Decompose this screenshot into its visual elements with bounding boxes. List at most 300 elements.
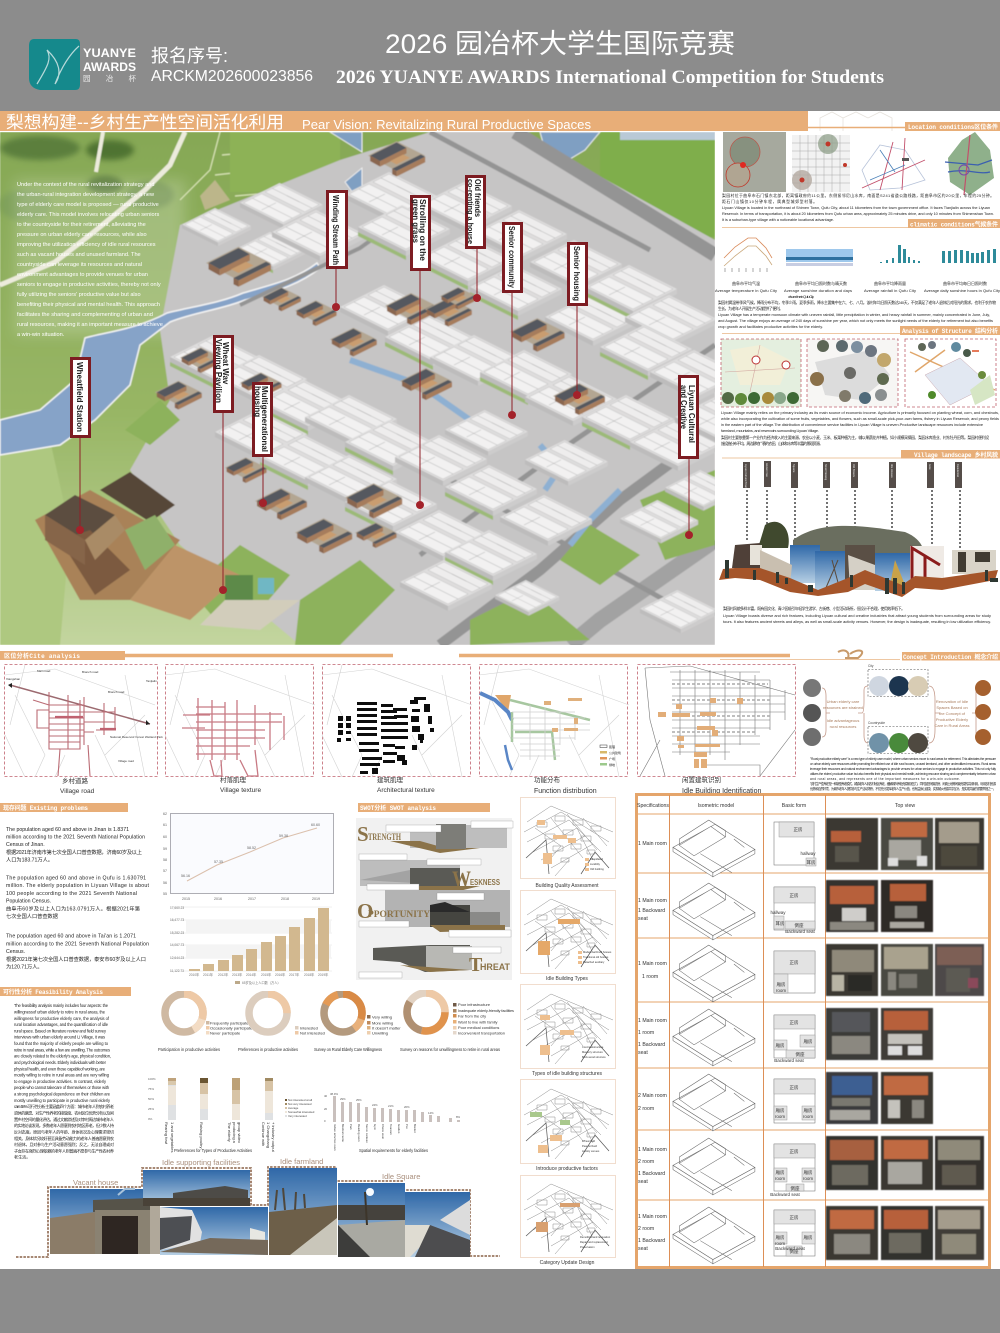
chart: stacked bars: Preferences for Types of Productive Activities: [174, 1148, 252, 1153]
chart: elderly population bar chart: 2014年: [246, 972, 257, 977]
chart: stacked bars: 25%: [148, 1107, 154, 1111]
map: idle building types: [520, 890, 616, 974]
chart: elderly population bar chart: 12,644.23: [170, 956, 184, 960]
concept countryside box: Countryside: [868, 721, 885, 725]
section bar: 区位分析Cite analysis: [4, 652, 80, 660]
panel: analysis of structure: [721, 326, 1000, 446]
callout: Liyuan Cultural and Creative: and Creative: [679, 385, 688, 429]
basic form plans: 倒座: [794, 922, 804, 929]
intro paragraph over aerial: Under the context of the rural revitalization strategy and: [17, 182, 154, 188]
basic form plans: 正房: [790, 1214, 799, 1221]
chart: elderly share line chart: 2019: [312, 897, 320, 901]
text: feasibility: 反对态度。原因与老年人的年龄、身体状况及心理需求密切: [14, 1128, 114, 1134]
chart captions: Average sunshine duration and days: [784, 288, 852, 293]
section label: location: [805, 122, 1000, 131]
text: feasibility: are closely related to the elderly's age, physical condition,: [14, 1054, 111, 1058]
chart: elderly share line chart: 56: [163, 881, 167, 885]
panel: village road map: National Reservoir Forest Wetland Park: [110, 735, 163, 739]
chart: elderly share line chart: 58.52: [247, 846, 256, 850]
chart: spatial requirements bars: Spatial requirements for elderly facilities: [359, 1148, 428, 1153]
panel: village road map: Tanjialin: [146, 679, 157, 683]
swot: strength: TRENGTH: [368, 832, 401, 842]
section label: structure: [722, 326, 1000, 335]
table header: Isometric model: [698, 803, 734, 809]
chart captions: [715, 280, 1000, 299]
text: climate: 梨园村属温带季风气候，降雨分布不均，冬季少雨，夏季多雨，降水主要集中在六、七、八月。该村年均日照天数达240天，不仅满足了老年人退休后对阳光的需求，也利于农作物: [718, 300, 996, 305]
section label: concept: Concept Introduction 概念介绍: [903, 653, 998, 661]
basic form plans: 正房: [790, 892, 799, 899]
chart: elderly share line chart: 61: [163, 823, 167, 827]
caption: idle building identification: Idle Building Identification: [682, 788, 761, 795]
map: idle structure types: Masonry structure: [582, 1050, 603, 1054]
canals: [350, 360, 620, 545]
text: structure: 施设施分布不均。周边耕地广袤的农田、山体和水库等丰富的景观资源。: [721, 441, 823, 446]
chart: elderly share line chart: 59: [163, 847, 167, 851]
swot: threat: T: [469, 954, 483, 976]
intro paragraph over aerial: the urban-rural integration development strategy, a new: [17, 192, 155, 198]
chart: spatial requirements bars: Reading room: [357, 1124, 361, 1142]
swot: opportunity: PPORTUNITY: [368, 909, 431, 919]
chart: unwillingness donut: Poor medical conditions: [458, 1025, 499, 1030]
intro paragraph over aerial: environment advantages to provide venues for urban: [17, 272, 148, 278]
panel: function distribution map: 公共建筑: [609, 750, 621, 755]
caption: village road: 乡村道路: [62, 776, 88, 785]
panel: idle building specifications table: [636, 794, 990, 1268]
chart: stacked bars: 1 Changchang: [266, 1122, 271, 1148]
chart: stacked bars: 1 and vegetables: [170, 1122, 175, 1152]
swot: weakness: W: [452, 866, 471, 891]
decoration: scooter icon: [838, 650, 862, 658]
map: idle building types: Traditional old houses: [583, 955, 609, 959]
panel: SWOT analysis: [356, 803, 513, 980]
chart: elderly population bar chart: 14,067.73: [170, 943, 184, 947]
concept right text: the Concept of: [939, 711, 966, 716]
landscape tags: Gate: [928, 464, 932, 470]
concept text: [810, 757, 997, 791]
chart: spatial requirements bars: Garden: [397, 1124, 401, 1134]
dashed photo frame: [16, 1167, 500, 1257]
chart: stacked bars: Raising poultry: [199, 1122, 204, 1148]
panel: feasibility analysis: [0, 987, 514, 1160]
callout: Old friends co-renting a house: [466, 176, 484, 302]
chart: elderly population bar chart: 2013年: [232, 972, 243, 977]
callout: Liyuan Cultural and Creative: Liyuan Cultural: [687, 385, 696, 443]
table row labels: 1 Backward: [638, 1171, 665, 1177]
chart captions: 曲阜市平均每日日照时数: [943, 280, 987, 286]
map: idle structure types: [520, 984, 616, 1068]
text: structure: farmland, mountains, and reservoirs surrounding Liyuan Village.: [721, 428, 819, 433]
panel: architectural texture map: [322, 664, 472, 777]
chart: spatial requirements bars: 21%: [388, 1104, 394, 1108]
chart: elderly share line chart: 56.16: [181, 874, 190, 878]
map: productive factors: Wheat field: [582, 1139, 596, 1143]
chart: elderly population bar chart: 17,660.23: [170, 906, 184, 910]
chart: spatial requirements bars: 40: [324, 1094, 328, 1098]
caption: types: Idle Building Types: [546, 976, 588, 982]
chart: spatial requirements bars: Tearoom: [389, 1124, 393, 1136]
competition subtitle: 2026 YUANYE AWARDS International Competition for Students: [336, 67, 884, 88]
logo: [29, 39, 136, 90]
table row labels: 1 Main room: [638, 1214, 667, 1220]
table row labels: seat: [638, 1050, 648, 1056]
text: feasibility: willingness for productive elderly care, the analysis of: [14, 1016, 110, 1021]
text: location: 梨园村位于曲阜市石门镇东北部，距离镇政府约11公里。东侧紧邻尼山水库，南面是S241省道公路线路，距曲阜市区约20公里，车程约25分钟。: [722, 193, 994, 198]
text: climate: Liyuan Village has a temperate monsoon climate with uneven rainfall, little precipitation in winter, and heavy rainfall in summer, mainly concentrated in June, July,: [718, 312, 990, 317]
chart: spatial requirements bars: 29%: [340, 1097, 346, 1101]
text: village landscape: tours. It also features ancient streets and alleys, as well as small-scale activity venues. However, the design is inadequate, resulting in low utilization efficiency.: [723, 619, 991, 624]
chart: willingness donut: It doesn't matter: [372, 1026, 401, 1030]
map: road network: [862, 138, 925, 190]
chart: elderly share line chart: 62: [163, 812, 167, 816]
concept left text: Urban elderly care: [827, 699, 860, 704]
basic form plans: 耳房: [776, 920, 785, 927]
caption: function distribution: 功能分布: [534, 775, 560, 784]
callout: Wheatfield Station: [72, 358, 90, 534]
basic form plans: hallway: [800, 851, 816, 856]
chart: spatial requirements bars: 20: [324, 1107, 328, 1111]
callout: Winding Stream Path: Winding Stream Path: [331, 195, 341, 265]
swot: opportunity: [357, 890, 511, 937]
basic form plans: 厢房: [776, 1169, 785, 1176]
chart: stacked bars: 50%: [148, 1097, 154, 1101]
panorama collage: [719, 522, 998, 597]
bright green patches: [125, 400, 715, 645]
panel: function distribution map: 绿地: [609, 762, 615, 767]
table row labels: seat: [638, 1179, 648, 1185]
chart: elderly share line chart: 2017: [248, 897, 256, 901]
landscape tags: Small Viewing: [824, 464, 828, 481]
text: feasibility: mostly willing to retire in rural areas and are very willing: [14, 1072, 110, 1078]
table row labels: 2 Main room: [638, 1093, 667, 1099]
dark roof courtyard buildings: [155, 141, 605, 554]
intro paragraph over aerial: such as vacant houses and unused farmland. The: [17, 252, 141, 258]
text: location: [722, 193, 994, 222]
chart: elderly share line chart: 60: [163, 835, 167, 839]
basic form plans: 厢房: [776, 1042, 785, 1049]
chart: stacked bars: Not interested at all: [288, 1098, 312, 1102]
text: village landscape: Liyuan Village boasts diverse and rich features, including Liyuan cultural and creative industries that attract young students from surrounding areas for study: [723, 613, 991, 618]
chart: spatial requirements bars: [324, 1092, 461, 1153]
text: feasibility: retire in rural areas, while a few are unwilling. The outcomes: [14, 1048, 110, 1052]
caption: factors: Introduce productive factors: [536, 1166, 598, 1172]
chart: elderly share line chart: [163, 812, 334, 901]
chart: elderly share line chart: 57.35: [214, 860, 223, 864]
basic form plans: Backward seat: [785, 929, 816, 934]
concept left text: resources are strained: [823, 705, 863, 710]
table row labels: 1 Backward: [638, 1238, 665, 1244]
concept countryside box: [868, 721, 928, 754]
basic form plans: 厢房: [776, 981, 786, 988]
chart: stacked bars: Somewhat interested: [288, 1110, 315, 1114]
text: existing problems: 根据2021年第七次全国人口普查数据，泰安市60岁及以上人口: [6, 955, 146, 963]
panel: location conditions: [722, 122, 1000, 222]
landscape tags: Ancient tree: [765, 463, 769, 477]
chart: spatial requirements bars: 8%: [456, 1115, 461, 1119]
chart: stacked bars: Average: [288, 1106, 299, 1110]
isometric models: [673, 820, 755, 1264]
text: existing problems: The population aged 60 and above in Jinan is 1.8371: [6, 827, 129, 833]
concept outcome circles: [975, 680, 991, 745]
basic form plans: room: [803, 1114, 813, 1119]
map: building quality: [520, 798, 616, 878]
panel: existing problems: [0, 803, 334, 985]
text: climate: crop growth and facilitates productive activities for the elderly.: [718, 324, 823, 329]
text: existing problems: Census of Jinan.: [6, 842, 45, 848]
text: existing problems: [6, 827, 150, 970]
chart: unwillingness donut: [400, 993, 514, 1052]
chart: participation donut: Never participate: [210, 1030, 241, 1036]
panel: concept introduction: [720, 652, 1000, 791]
section label: existing: 现存问题 Existing problems: [3, 804, 88, 812]
chart: stacked bars: Not very interested: [288, 1102, 312, 1106]
text: location: It is a suburban-type village with a noticeable locational advantage.: [722, 217, 834, 222]
chart: participation donut: Occasionally participate: [210, 1026, 253, 1030]
callout: Old friends co-renting a house: co-renting a house: [466, 179, 475, 244]
chart: stacked bars: The elderly: [227, 1122, 232, 1142]
map: landscape resources: [721, 339, 801, 407]
logo: YUANYE: [83, 48, 136, 60]
photo: idle supporting top: [143, 1170, 250, 1206]
caption: update: Category Update Design: [540, 1260, 595, 1266]
callout: Strolling on the green grass: [411, 196, 430, 509]
chart: temperature: [724, 238, 772, 272]
logo: 园 冶 杯: [83, 73, 136, 83]
intro paragraph over aerial: countryside can leverage its resources and natural: [17, 262, 142, 268]
text: feasibility: [14, 1003, 114, 1160]
panel: village road map: Branch road: [108, 690, 125, 694]
text: existing problems: 七次全国人口普查数据: [6, 912, 58, 920]
chart captions: of sunshine in Qufu City: [788, 294, 814, 299]
chart: willingness donut: More willing: [372, 1020, 393, 1026]
concept connectors: [822, 686, 979, 743]
panel: climatic conditions: [715, 219, 1000, 329]
chart: stacked bars: Continue with: [261, 1122, 266, 1146]
text: existing problems: million. The elderly population in Liyuan Village is about: [6, 883, 150, 889]
chart: spatial requirements bars: Park: [349, 1124, 353, 1130]
basic form plans: 倒座: [796, 1051, 805, 1058]
text: existing problems: Census.: [6, 949, 25, 955]
chart: daily sunshine: [942, 249, 996, 263]
basic form plans: room: [803, 1176, 813, 1181]
concept text: on urban elderly care resources while promoting the efficient use of idle rural houses, unused farmland, and other underutilized resources. Rural areas: [810, 762, 996, 766]
map: productive factors: [520, 1080, 616, 1164]
basic form plans: Backward seat: [775, 1246, 806, 1251]
concept city box: [868, 664, 928, 696]
concept text: 优势和自然环境，为城市老年人提供参与生产活动场所，不仅充分发挥老年人生产价值，也有益身心健康，实现城乡资源共享互补，是实现共赢的重要举措之一。: [810, 786, 996, 791]
text: feasibility: 的实地访谈发现，多数老年人愿意到农村地区养老，但少数人持: [14, 1122, 114, 1128]
table row labels: seat: [638, 916, 648, 922]
chart captions: Average temperature in Qufu City: [715, 288, 777, 293]
intro paragraph over aerial: improving the utilization efficiency of idle rural resources: [17, 242, 156, 248]
callout: Multigenerational housing: [253, 384, 272, 507]
chart: elderly share line chart: 60.60: [311, 823, 320, 827]
basic form plans: room: [775, 1114, 785, 1119]
registration number: ARCKM202600023856: [151, 68, 313, 85]
chart: participation donut: Participation in productive activities: [158, 1047, 220, 1052]
project title band: [0, 111, 892, 132]
caption: village texture: 村落肌理: [220, 775, 246, 784]
basic form plans: 厢房: [776, 1107, 785, 1114]
village ground: [130, 132, 715, 645]
caption: village texture: [220, 775, 261, 794]
panel: site analysis: [0, 651, 796, 795]
caption: architectural texture: Architectural texture: [377, 787, 435, 794]
landscape tags: Square: [792, 464, 796, 473]
photo labels: Idle farmland: [280, 1157, 323, 1166]
callout: Wheat Way Viewing Pavilion: [214, 336, 232, 594]
chart: rainfall: [880, 245, 920, 263]
photo labels: [73, 1157, 420, 1187]
concept left text: rural resources: [830, 724, 856, 729]
text: climate: 生长，为老年人开展生产活动提供了便利。: [718, 306, 783, 311]
text: existing problems: 为120.71万人。: [6, 962, 43, 970]
callout: Old friends co-renting a house: Old friends: [473, 179, 482, 217]
table row labels: 1 Main room: [638, 1018, 667, 1024]
callout: Wheat Way Viewing Pavilion: Viewing Pavilion: [214, 339, 223, 403]
aerial axonometric masterplan: [0, 132, 767, 645]
basic form plans: Backward seat: [774, 1058, 805, 1063]
panel: village texture map: [165, 664, 315, 777]
section label: swot: SWOT分析 SWOT analysis: [360, 804, 436, 812]
callout: Senior housing: Senior housing: [572, 246, 582, 301]
photo labels: Idle supporting facilities: [162, 1158, 240, 1167]
text: existing problems: 100 people according to the 2021 Seventh National: [6, 891, 137, 897]
chart: stacked bars: 75%: [148, 1087, 154, 1091]
chart: elderly share line chart: 2016: [214, 897, 222, 901]
swot: weakness: ESKNESS: [470, 878, 501, 887]
text: feasibility: 老生活。: [14, 1154, 30, 1160]
photo: idle square: [338, 1183, 405, 1257]
landscape tags: Residential: [956, 464, 960, 477]
chart captions: 曲阜市平均降雨量: [874, 280, 906, 286]
text: feasibility: 相关。身体状况较好甚至具备劳动能力的老年人普遍愿意到农: [14, 1135, 114, 1141]
chart: spatial requirements bars: Market: [413, 1124, 417, 1133]
basic form plans: 正房: [794, 826, 803, 833]
callout: Senior community: Senior community: [507, 226, 517, 288]
table row labels: 1 room: [642, 974, 658, 980]
chart: unwillingness donut: Inadequate elderly-friendly facilities: [458, 1008, 514, 1013]
landscape ground: [0, 132, 715, 645]
text: structure: while also incorporating the cultivation of some fruits, vegetables, and flowers, such as small-scale pick-your-own farms, fishery in Liyuan Reservoir, and peony fields: [721, 416, 999, 421]
chart: elderly population bar chart: 2012年: [218, 972, 229, 977]
chart: stacked bars: + industry output: [271, 1122, 276, 1153]
chart: spatial requirements bars: 0: [324, 1119, 326, 1123]
basic form plans: 正房: [790, 1019, 799, 1026]
project title band: 梨想构建--乡村生产性空间活化利用: [6, 113, 284, 132]
landscape tags: Old Streets: [852, 464, 856, 478]
section label: village landscape: [722, 450, 1000, 459]
logo: AWARDS: [83, 62, 136, 74]
text: existing problems: Population Census.: [6, 898, 51, 904]
chart: participation donut: Frequently participate: [210, 1020, 249, 1026]
text: existing problems: million according to the 2021 Seventh National Population: [6, 942, 149, 948]
text: feasibility: 置乡村空间的量化评估。通过文献综述及对李村周边城市老年人: [14, 1116, 114, 1122]
table row labels: [638, 841, 667, 1252]
text: climate: and August. The village enjoys an average of 240 days of sunshine per year, which not only meets the sunlight needs of the elderly for retirement but also benefits: [718, 318, 993, 323]
chart: stacked bars: [148, 1077, 315, 1153]
chart: preferences donut: Interested: [300, 1026, 318, 1030]
map: category update: [520, 1176, 616, 1258]
wheatfield station: [35, 472, 300, 630]
chart: spatial requirements bars: 14%: [428, 1111, 434, 1115]
chart: elderly population bar chart: 11,122.73: [170, 969, 184, 973]
caption: function distribution: [534, 775, 597, 795]
swot: opportunity: O: [357, 899, 373, 923]
basic form plans: Backward seat: [770, 1192, 801, 1197]
intro paragraph over aerial: [17, 182, 163, 338]
map: category update: Demolition and renovation: [580, 1235, 611, 1239]
chart: spatial requirements bars: Pier: [405, 1124, 409, 1129]
text: climate: [718, 300, 996, 329]
text: feasibility: rural space. Based on literature review and field survey: [14, 1028, 107, 1034]
text: existing problems: 根据2021年济南市第七次全国人口普查数据，济南60岁及以上: [6, 848, 142, 856]
text: existing problems: million according to the 2021 Seventh National Population: [6, 834, 145, 840]
chart: elderly share line chart: 55: [163, 892, 167, 896]
chart: elderly population bar chart: 65岁及以上人口数（万人）: [242, 980, 281, 985]
callout: Liyuan Cultural and Creative: [679, 376, 698, 539]
competition title: 2026 园冶杯大学生国际竞赛: [385, 29, 735, 59]
panel: village road map: Branch road: [82, 670, 99, 674]
chart: willingness donut: Survey on Rural Elderly Care Willingness: [314, 1047, 382, 1052]
table row labels: 2 room: [638, 1159, 654, 1165]
panel: idle building identification map: [638, 664, 796, 776]
basic form plans: room: [775, 1241, 785, 1246]
table row labels: 2 room: [638, 1226, 654, 1232]
panel: village road map: Village road: [118, 759, 134, 763]
text: feasibility: 退休的意愿、对生产性养老的接受度、农村区位优势分析以及闲: [14, 1110, 114, 1116]
text: feasibility: 子女存在强烈心理依赖的老年人则普遍不愿参与生产性农村养: [14, 1148, 114, 1154]
section label: feasibility: [0, 987, 131, 996]
chart: elderly share line chart: 2015: [182, 897, 190, 901]
basic form plans: room: [775, 1176, 785, 1181]
map: idle building types: Detached auxiliary: [583, 960, 605, 964]
chart: unwillingness donut: Want to live with family: [458, 1020, 497, 1024]
map: road structure: [905, 339, 996, 407]
panel: function distribution map: 广场: [609, 756, 615, 761]
caption: idle building identification: 闲置建筑识别: [682, 775, 721, 784]
map: idle building types: Modern self-built houses: [583, 950, 612, 954]
header band: [0, 0, 1000, 111]
chart: stacked bars: 100%: [148, 1077, 156, 1081]
table header: Specifications: [637, 803, 669, 809]
caption: village road: [60, 776, 95, 795]
landscape tags: [743, 461, 962, 489]
landscape tags: Idle Houses: [890, 464, 894, 478]
caption: idle building identification: [682, 775, 761, 795]
map: county green: [945, 132, 994, 195]
text: existing problems: The population aged 60 and above in Qufu is 1.630791: [6, 876, 146, 882]
chart: unwillingness donut: Survey on reasons for unwillingness to retire in rural areas: [400, 1047, 500, 1052]
roads: [240, 132, 715, 645]
map: grid: [792, 134, 850, 192]
white village blocks: [170, 172, 767, 633]
section label: location: Location conditions区位条件: [908, 123, 998, 131]
panel: village landscape section: [719, 450, 1000, 624]
text: location: Liyuan Village is located in the northeast of Shimen Town, Qufu City, about 11 kilometers from the town government office. It faces Tianjialin across the Liyuan: [722, 205, 990, 210]
text: structure: 梨园村主要依靠第一产业作为经济收入的主要来源。农业以小麦、玉米、板栗种植为主，辅以果蔬花卉种植，如小规模采摘园、梨园水库渔业、村东牡丹田等。梨园村便利设: [721, 435, 989, 440]
chart captions: Average daily sunshine hours in Qufu City: [924, 288, 1000, 293]
chart: preferences donut: [238, 994, 325, 1052]
registration number: [151, 46, 313, 85]
basic form plans: 正房: [790, 1148, 799, 1155]
registration number: 报名序号:: [151, 46, 228, 66]
text: feasibility: mostly unwilling to participate in productive rural elderly: [14, 1098, 111, 1103]
text: feasibility: a strong psychological dependence on their children are: [14, 1092, 111, 1096]
chart: participation donut: [158, 994, 253, 1052]
concept right text: Productive Elderly: [936, 717, 968, 722]
chart: elderly share line chart: 2018: [281, 897, 289, 901]
chart: spatial requirements bars: 20%: [404, 1105, 410, 1109]
